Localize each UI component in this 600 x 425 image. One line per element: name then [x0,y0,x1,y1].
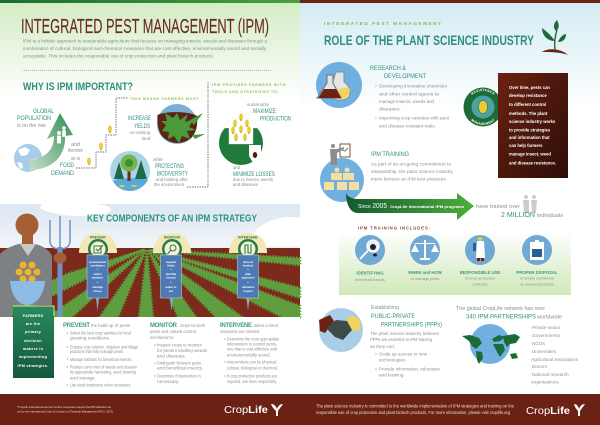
text: research and development: Developing innovative chemistry [379,84,448,88]
callout: farmers: IPM strategies. [17,363,49,368]
badge: resistance management: MANAGEMENT [471,118,494,125]
text: prevent column: and storage. [70,376,96,380]
text: food demand: and [71,142,80,148]
text: monitor column [150,323,208,384]
text: prevent column: Employ crop rotation, irrigation and tillage [70,344,138,350]
text: minimize losses: and diseases [233,182,258,187]
text: increase yields: on existing [129,130,151,135]
callout: farmers: are the [26,321,41,326]
callout: resistance text box: Over time, pests can [509,85,550,90]
text: global population: is on the rise [17,123,46,129]
text: monitor column: MONITOR [150,323,178,329]
callout: farmers: primary [25,329,42,334]
callout: farmers: decision [24,338,42,343]
list: partner types: · Universities [529,349,557,354]
icon: world map globe [462,324,520,364]
text: global network [456,306,562,320]
text: responsible use [460,270,501,286]
text: monitor column: Inspect crops to monitor [157,342,202,348]
badge: resistance management [464,88,498,126]
text: monitor column: and diseases. [157,354,186,358]
sign: prevent: conditions [90,264,105,268]
text: protecting biodiversity: while [153,157,163,162]
text: prevent column: Select the best crop varieties for local [70,330,131,336]
text: food demand: therefore [68,148,83,154]
logo: croplife left: CropLife [224,405,268,416]
text: prevent column: practices that help manage pests. [70,349,124,354]
icon: container [522,235,552,265]
footer left: *CropLife International and its member companies support the IPM definition set [17,405,111,409]
text: trained 2 million [476,195,563,219]
sign: monitor: MONITOR [164,236,181,240]
sign: prevent: varieties [92,276,104,280]
label: integrated pest management: INTEGRATED PEST MANAGEMENT [324,21,441,27]
callout: resistance text box: and disease resistance. [509,160,556,166]
text: intervene column [220,323,279,384]
text: protecting biodiversity [153,157,189,187]
label: IPM provides farmers: TOOLS AND STRATEGIES TO: [212,90,279,94]
icon: production arrow circle with pest [219,111,263,166]
text: public-private partnerships: Provide information, education [379,366,440,372]
text: global population: POPULATION [17,115,51,122]
footer right: responsible use of crop protection and plant biotech products. For more information, please visit croplife.org [316,410,511,415]
text: public-private partnerships: Scale up access to new [379,352,428,356]
heading: IPM training includes: IPM TRAINING INCLUDES: [358,226,431,230]
text: monitor column: necessary. [157,379,179,384]
text: increase yields: land [142,136,151,141]
sign: intervene: minimize [242,285,255,289]
icon: flasks [316,62,362,108]
list: partner types: · Agricultural associations [529,357,579,362]
text: intervene column: one that is cost-effective and [227,346,277,352]
text: intervene column: Interventions can be physical, [227,360,277,364]
sign: monitor: + [170,267,172,271]
text: monitor column: Determine if intervention is [157,374,202,378]
icon: IPM training [320,144,364,202]
text: prevent column: by appropriate harvesting, seed cleaning [70,370,136,374]
sign: monitor: + [170,280,172,284]
text: monitor column: crops for both [180,323,205,328]
text: proper disposal: or unused products [520,282,554,286]
logo: croplife left [224,404,283,416]
text: protecting biodiversity: PROTECTING [155,163,184,170]
text: intervene column: environmentally sound. [227,352,271,358]
text: minimize losses: due to insects, weeds [233,177,273,182]
callout: resistance text box: to provide strategies [509,128,551,132]
arrow: since 2005 [346,193,474,220]
sign: intervene: plan [245,272,251,276]
text: research and development: RESEARCH & [370,65,407,72]
text: intervene column: If crop protection products are [227,374,277,378]
text: intervene column: when control [254,323,278,328]
text: intervene column: INTERVENE [220,323,252,329]
text: responsible use: RESPONSIBLE USE [460,270,501,275]
text: research and development: manage insects, weeds and [379,99,434,104]
list: partner types: · NGOs [529,341,546,346]
arrow: since 2005: CropLife International IPM programs [390,204,465,209]
list: partner types: · Governments [529,333,561,338]
text: when and how: WHEN and HOW [408,270,443,275]
callout: resistance text box: can help farmers [509,143,543,148]
text: IPM training [371,151,454,182]
text: public-private partnerships: The plant science industry believes [370,331,440,336]
logo: croplife right: CropLife [526,406,570,417]
text: identifying: IDENTIFYING [356,270,384,276]
intro text [23,38,267,58]
label: IPM provides farmers: IPM PROVIDES FARMERS WITH [212,83,286,87]
sign: intervene: + [247,267,249,271]
list: partner types: · Donors [529,364,548,369]
text: maximize production [247,102,291,122]
text: protecting biodiversity: BIODIVERSITY [157,170,189,178]
photo: crops circle [157,104,205,144]
sign: monitor [153,233,191,311]
text: identifying: beneficial insects [355,277,385,282]
text: prevent column: Manage habitats for beneficial insects. [70,357,132,362]
logo: croplife right [526,404,585,417]
text: public-private partnerships: and training [379,372,404,378]
text: prevent column: PREVENT [63,323,90,329]
text: prevent column: the build up of pests [91,323,131,328]
text: global network: 340 IPM PARTNERSHIPS [466,314,536,320]
dotted pathway arrows [76,82,208,187]
list: partner types: · Private sector [529,325,561,330]
text: responsible use: products [473,282,488,286]
label: IPM provides farmers [212,83,286,94]
sign: prevent: promotional [89,260,106,264]
text: research and development [370,65,450,128]
list: partner types: organisations [531,380,560,384]
text: trained 2 million: individuals [537,213,563,219]
icon: seedling [542,20,568,55]
text: public-private partnerships: PPPs are essential to IPM training [370,337,432,342]
text: research and development: and other control agents to [379,92,439,96]
callout: resistance text box: science industry works [509,119,556,124]
text: intervene column: cultural, biological or chemical. [227,366,278,370]
text: food demand: so is [71,156,80,162]
sign: intervene: method [243,264,253,268]
intro text: IPM is a holistic approach to sustainable agriculture that focuses on managing insects, weeds and diseases through a [23,38,267,44]
arrow: since 2005: Since 2005 [358,203,387,210]
footer right [300,394,600,425]
text: monitor column: pests and natural control [150,329,196,334]
text: prevent column: Reduce carry-over of weeds and disease [70,364,137,370]
text: trained 2 million: 2 MILLION [501,210,535,219]
text: minimize losses: and [233,165,241,170]
intro text: combination of cultural, biological and chemical measures that are cost effective, environmentally sound and socially [23,46,267,51]
text: proper disposal: PROPER DISPOSAL [516,270,558,275]
text: research and development: DEVELOPMENT [384,73,426,80]
text: when and how: to manage pests [411,276,439,281]
text: prevent column: growing conditions. [70,336,110,340]
text: research and development: and disease resistant traits. [379,124,436,128]
text: global population [17,108,54,129]
text: increase yields: YIELDS [134,123,150,130]
sign: intervene [229,233,267,311]
text: IPM training: trains farmers on IPM best practices. [371,176,447,182]
text: proper disposal: of empty containers [520,276,554,280]
text: public-private partnerships: PUBLIC-PRIVATE [371,313,415,320]
sign: prevent: + [97,267,99,271]
icon: magnifier [355,235,385,265]
text: maximize production: MAXIMIZE [253,108,276,115]
text: responsible use: of crop protection [465,276,495,280]
text: food demand: DEMAND [51,170,74,177]
text: IPM training: stewardship, the plant science industry [371,169,454,174]
sign: prevent: + [97,280,99,284]
intro text: acceptable. This includes the responsible use of crop protection and plant biotech products. [23,54,214,58]
panel: IPM training includes [339,232,571,295]
callout: farmers: makers in [23,346,44,351]
text: prevent column: Use seed treatments when necessary. [70,382,131,388]
text: maximize production: sustainably [247,102,270,107]
callout: resistance text box [498,73,568,178]
text: protecting biodiversity: the environment [154,182,185,187]
text: intervene column: required, use them responsibly. [227,379,277,384]
text: when and how [408,270,443,281]
sign: intervene: choose [243,260,253,264]
text: IPM training: As part of an on-going commitment to [371,162,451,166]
sign: monitor: identify [166,272,177,276]
icons: corn steps [86,125,113,166]
callout: farmers [13,306,54,378]
callout: farmers: FARMERS [23,313,44,318]
sign: monitor: fields [167,264,175,268]
footer left [0,394,300,425]
heading: why is IPM important: WHY IS IPM IMPORTANT? [23,81,133,93]
text: proper disposal [516,270,558,286]
text: global network: worldwide [536,314,562,320]
text: trained 2 million: have trained over [476,204,520,210]
callout: resistance text box: develop resistance [509,93,547,98]
text: intervene column: Determine the most appropriate [227,336,279,342]
icon: scales [410,235,440,265]
callout: resistance text box: to different control [509,102,546,107]
text: minimize losses: MINIMIZE LOSSES [233,171,275,178]
sign: prevent [79,233,117,311]
sign: monitor: when to [165,285,177,289]
callout: resistance text box: and information that [509,135,550,140]
callout: farmers: implementing [19,354,48,359]
text: public-private partnerships: as they can: [370,344,395,349]
sign: monitor: insects [166,276,176,280]
icon: handshake [319,308,363,352]
label: this means farmers must: THIS MEANS FARMERS MUST [130,97,199,101]
text: monitor column: mechanisms: [150,335,174,340]
icon: sprayer worker [465,235,495,265]
text: research and development: Improving crop varieties with pest [379,116,450,120]
text: identifying [355,270,385,282]
text: monitor column: for pests including weeds [157,348,208,353]
text: maximize production: PRODUCTION [260,116,291,122]
footer right: The plant science industry is committed to the worldwide implementation of IPM strategies and training on the [316,404,515,408]
text: food demand: FOOD [60,162,74,169]
callout: resistance text box: methods. The plant [509,111,548,116]
heading: key components: KEY COMPONENTS OF AN IPM STRATEGY [87,212,257,224]
sign: intervene: INTERVENE [238,236,258,240]
text: intervene column: intervention to control pests, [227,342,277,346]
text: monitor column: and beneficial insects. [157,366,203,370]
text: public-private partnerships: Establishing [371,305,399,311]
sign: prevent: manage [92,285,103,289]
text: increase yields: INCREASE [128,115,151,122]
sign: prevent: stress [93,289,102,293]
text: public-private partnerships: PARTNERSHIPS (PPPs) [381,322,442,328]
icon: biodiversity circle [110,151,150,191]
sign: monitor: inspect [166,260,176,264]
text: research and development: diseases. [379,106,401,112]
text: protecting biodiversity: and looking after [156,177,189,182]
illustration: farmer with pitchfork and basket [0,214,70,317]
text: monitor column: Distinguish between pests [157,360,202,366]
footer left: out by the International Code of Conduct on Pesticide Management (FAO, 2013) [17,410,113,414]
text: food demand [51,142,83,177]
icon: globe with rising arrow [14,113,73,172]
text: increase yields [128,115,151,141]
sign: monitor: act [169,289,173,293]
panel: key components scene [0,191,300,317]
sign: intervene: impact [243,289,253,293]
sign: intervene: approach [241,276,255,280]
text: IPM training: IPM TRAINING [371,151,409,158]
text: public-private partnerships: technologies [379,358,406,362]
list: partner types: · National research [529,372,569,377]
text: prevent column [63,323,138,388]
sign: intervene: + [247,280,249,284]
list: partner types [529,325,579,384]
text: minimize losses [233,165,275,187]
text: intervene column: measures are needed: [220,329,260,334]
callout: resistance text box: manage insect, weed [509,152,551,156]
text: global network: The global CropLife network has over [456,306,545,312]
sign: prevent: select [93,272,102,276]
text: global population: GLOBAL [33,108,54,115]
sign: prevent: PREVENT [90,236,107,240]
badge: resistance management: RESISTANCE [471,88,495,95]
text: public-private partnerships [370,305,442,378]
title: INTEGRATED PEST MANAGEMENT (IPM) [21,16,269,38]
